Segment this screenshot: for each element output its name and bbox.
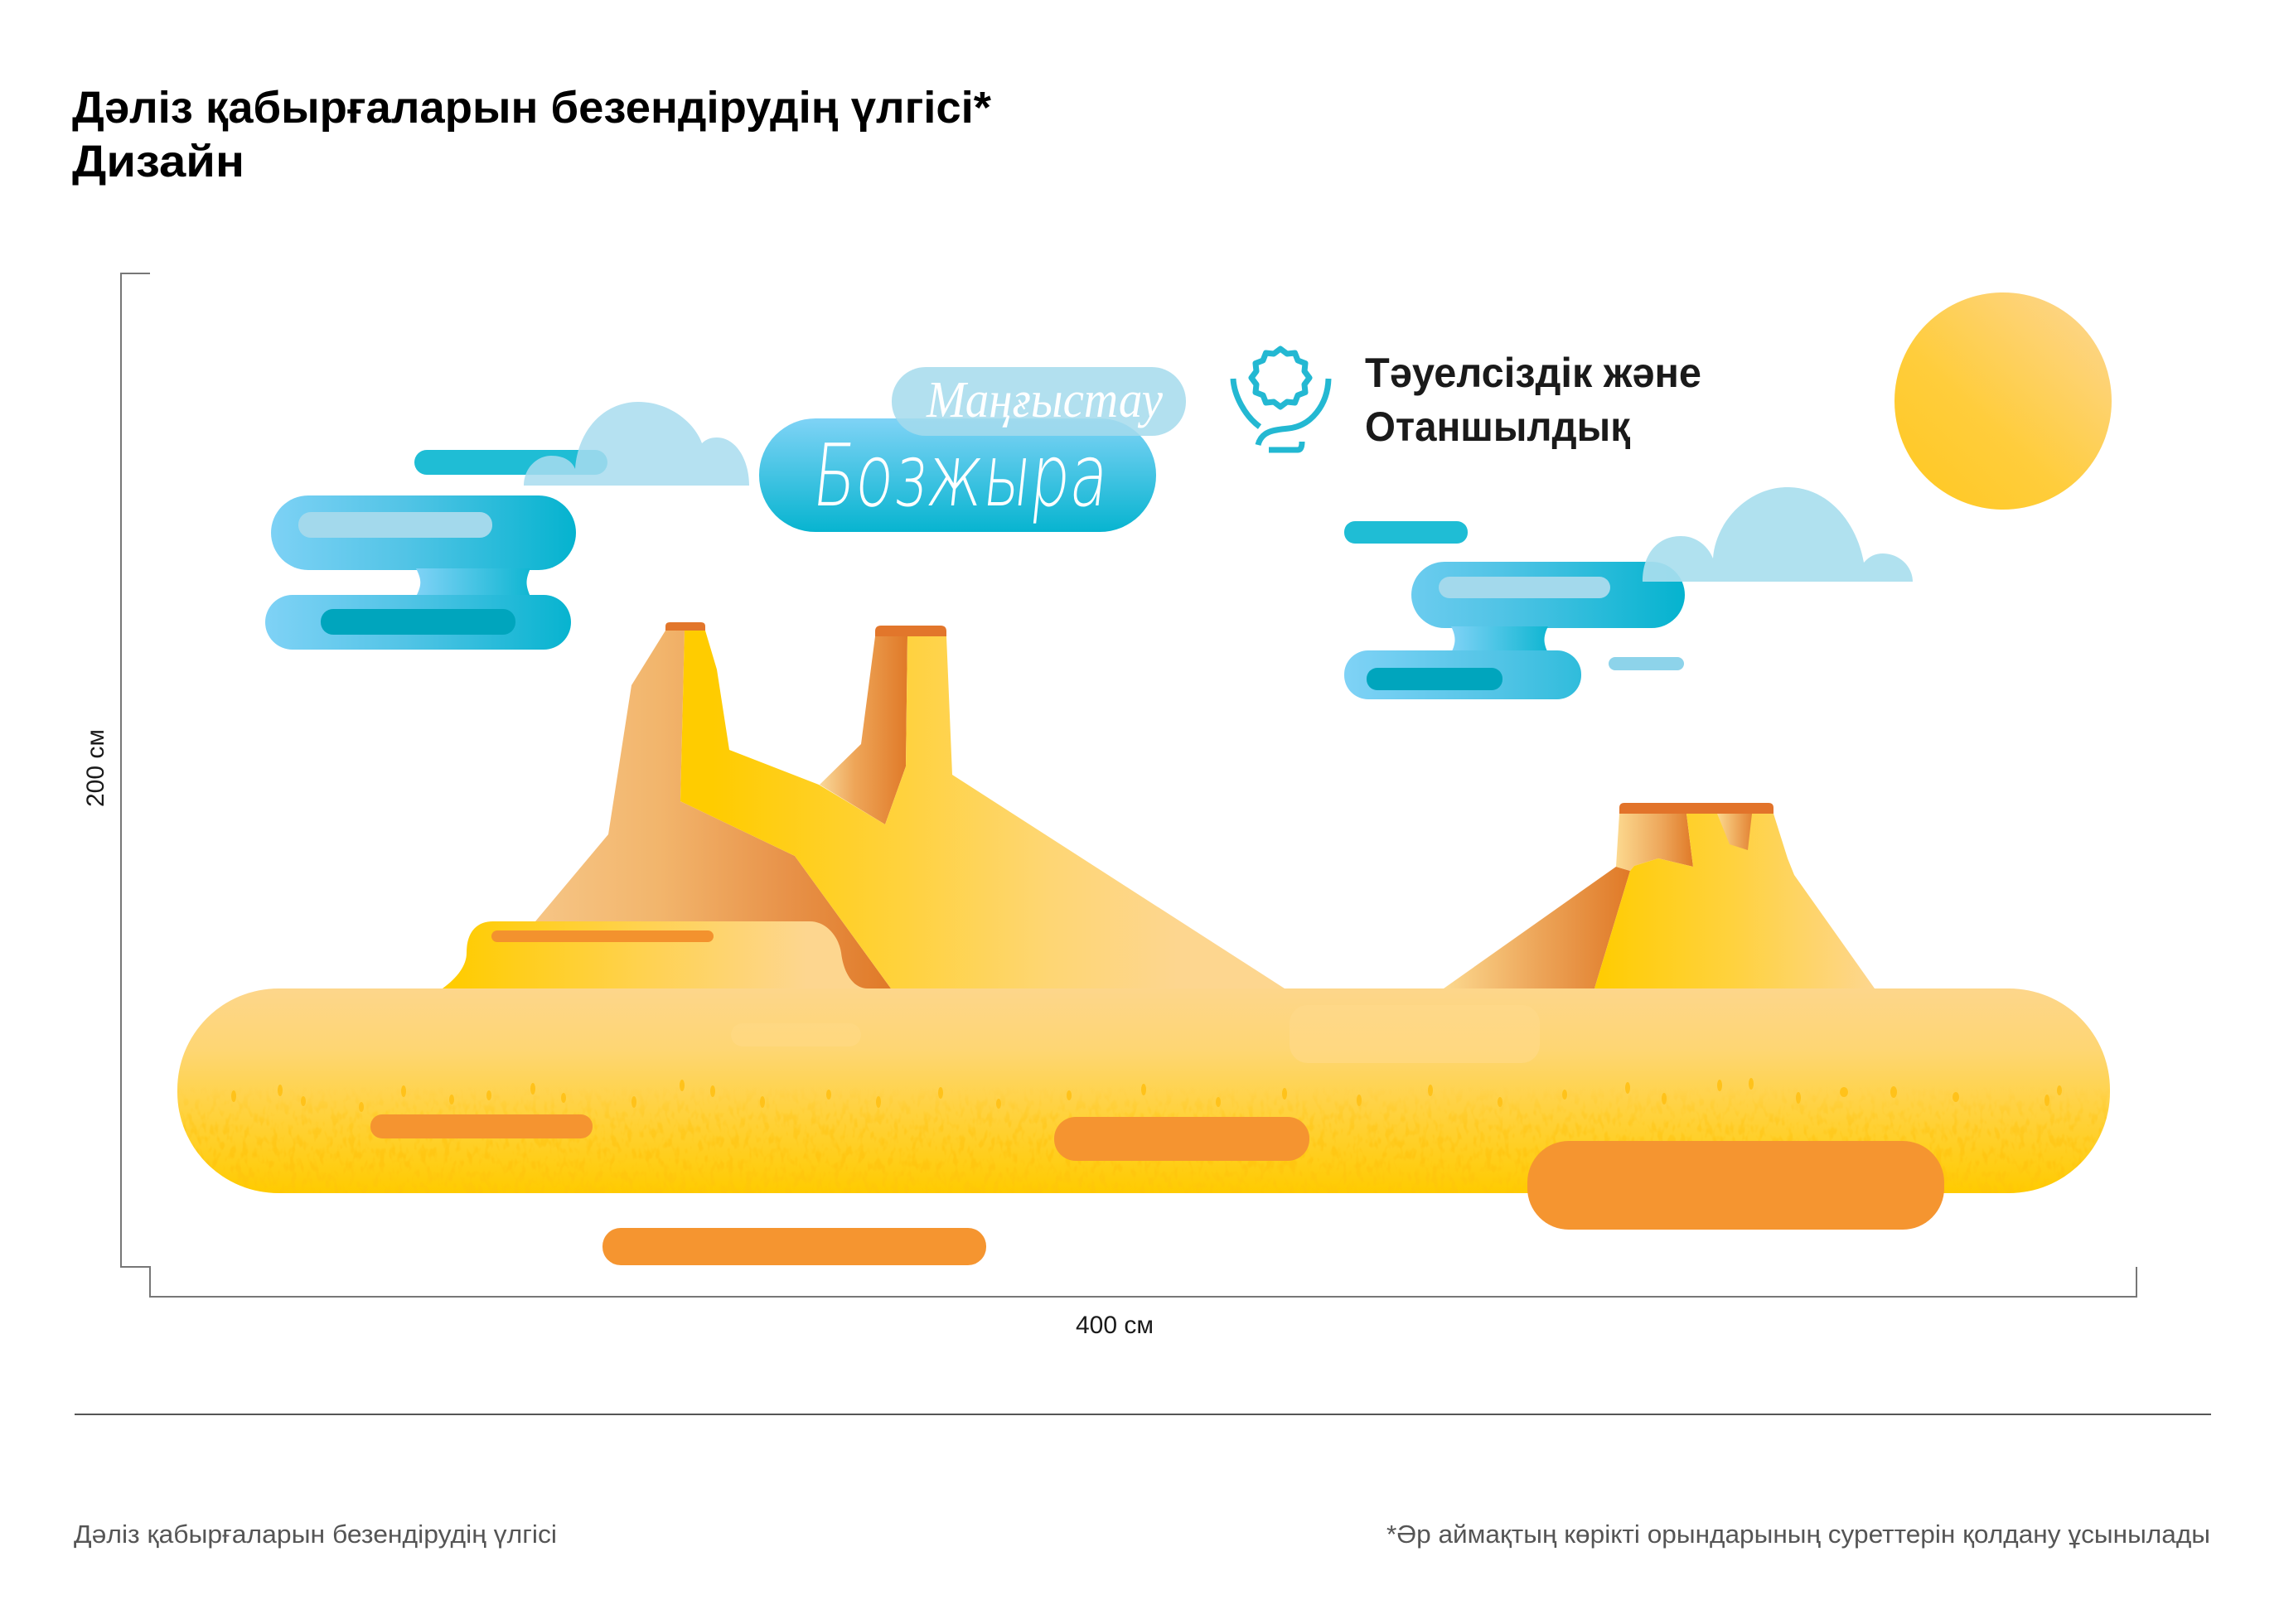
faint highlight left bbox=[731, 1023, 861, 1046]
orange bar on ground left bbox=[370, 1114, 593, 1138]
label: 200 cm: 200 см bbox=[82, 729, 109, 807]
icon: independence emblem bbox=[1233, 349, 1328, 450]
left upper cloud bbox=[524, 402, 749, 486]
sun bbox=[1894, 292, 2112, 510]
dimension bracket: 200 cm height and 400 cm width bbox=[121, 273, 2136, 1297]
right rock formation bbox=[1444, 803, 1875, 988]
footer rule bbox=[75, 1414, 2211, 1415]
orange bar on ground centre bbox=[1054, 1117, 1309, 1161]
right upper cloud bbox=[1643, 487, 1913, 582]
right layered cloud bbox=[1344, 562, 1685, 699]
small light bar bbox=[1609, 657, 1684, 670]
faint highlight right bbox=[1290, 1005, 1540, 1063]
footer left caption: Дәліз қабырғаларын безендірудің үлгісі bbox=[74, 1520, 557, 1549]
sign: Бозжыра: Бозжыра bbox=[808, 425, 1114, 526]
orange bar below ground bbox=[602, 1228, 986, 1265]
heading: independence and patriotism: Тәуелсіздік және bbox=[1365, 350, 1701, 396]
right small bar bbox=[1344, 521, 1468, 544]
title: Дизайн bbox=[72, 137, 244, 186]
left spire cap bbox=[665, 622, 705, 631]
footer right note: *Әр аймақтың көрікті орындарының суреттерін қолдану ұсынылады bbox=[1386, 1520, 2210, 1549]
label: 400 cm: 400 см bbox=[1076, 1312, 1154, 1339]
right rock cap bbox=[1619, 803, 1773, 814]
heading: independence and patriotism: Отаншылдық bbox=[1365, 404, 1631, 450]
title bbox=[72, 83, 991, 186]
sign: Бозжыра bbox=[759, 418, 1156, 532]
sign: Маңғыстау: Маңғыстау bbox=[926, 372, 1163, 428]
left rock formation bbox=[489, 622, 1285, 988]
low mesa bbox=[443, 921, 868, 988]
middle spire cap bbox=[875, 626, 946, 636]
left layered cloud bbox=[265, 495, 576, 650]
title: Дәліз қабырғаларын безендірудің үлгісі* bbox=[72, 83, 991, 133]
left upper small bar bbox=[414, 450, 607, 475]
sandy ground bbox=[177, 988, 2110, 1193]
large orange shape bbox=[1527, 1141, 1944, 1230]
heading: independence and patriotism bbox=[1365, 350, 1701, 450]
